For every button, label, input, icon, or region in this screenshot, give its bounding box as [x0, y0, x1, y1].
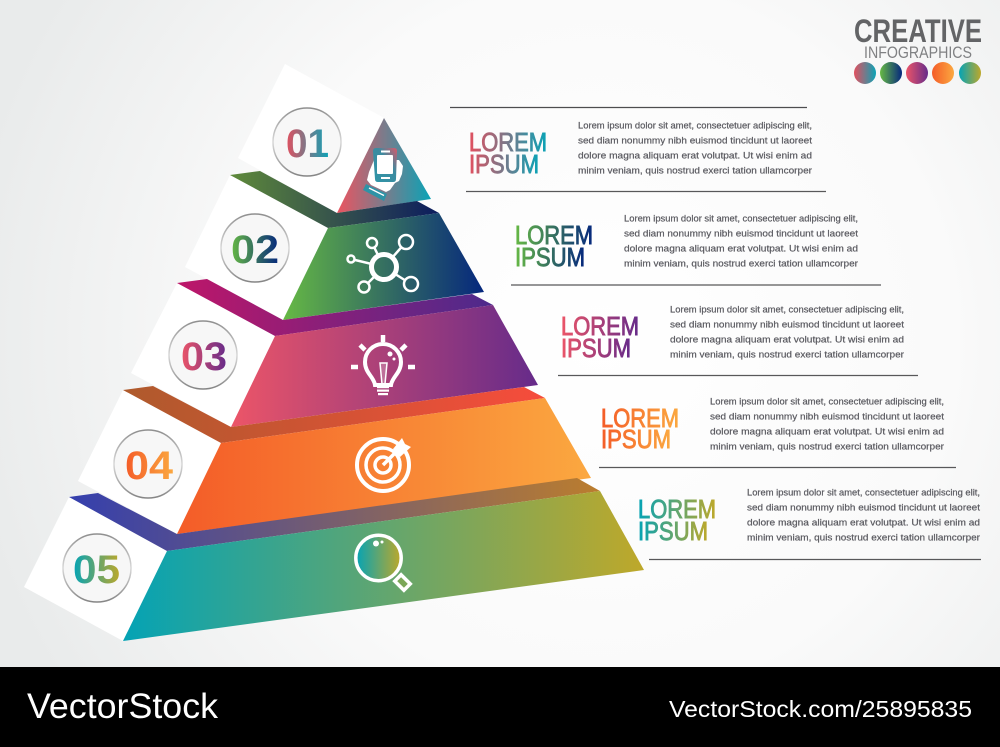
icon: phone in hand	[363, 148, 403, 201]
text block 3: IPSUM	[561, 333, 631, 363]
number badge 01	[273, 108, 341, 176]
pyramid tier 3	[123, 305, 545, 443]
number badge 05: 05	[73, 548, 120, 592]
icon: magnifying glass	[356, 535, 410, 590]
number badge 01: 01	[286, 122, 329, 166]
pyramid tier 2	[177, 213, 493, 336]
text block 2: IPSUM	[515, 242, 585, 272]
text block 2: LOREM	[515, 220, 593, 250]
text block 2: dolore magna aliquam erat volutpat. Ut wisi enim ad	[624, 244, 858, 254]
footer bar: VectorStock	[27, 687, 219, 726]
text block 1: dolore magna aliquam erat volutpat. Ut wisi enim ad	[578, 150, 812, 162]
number badge 02	[221, 214, 289, 282]
text block 3: minim veniam, quis nostrud exerci tation ullamcorper	[670, 350, 904, 360]
text block 5: dolore magna aliquam erat volutpat. Ut wisi enim ad	[747, 518, 980, 528]
text block 3: LOREM	[561, 311, 639, 341]
text block 3: dolore magna aliquam erat volutpat. Ut wisi enim ad	[670, 334, 904, 346]
text block 3: Lorem ipsum dolor sit amet, consectetuer adipiscing elit,	[670, 304, 904, 316]
text block 1	[450, 108, 826, 192]
icon: target with arrow	[357, 438, 411, 491]
text block 5: Lorem ipsum dolor sit amet, consectetuer adipiscing elit,	[747, 488, 980, 498]
pyramid tier 5	[123, 491, 644, 641]
text block 1: LOREM	[469, 127, 547, 157]
text block 4: LOREM	[601, 403, 679, 433]
text block 5: IPSUM	[638, 516, 708, 546]
text block 4: minim veniam, quis nostrud exerci tation ullamcorper	[710, 442, 944, 452]
text block 1: minim veniam, quis nostrud exerci tation ullamcorper	[578, 166, 812, 176]
logo: creative infographics	[854, 13, 982, 84]
text block 2: Lorem ipsum dolor sit amet, consectetuer adipiscing elit,	[624, 214, 858, 224]
number badge 04: 04	[125, 444, 174, 488]
icon: light bulb	[351, 335, 415, 400]
text block 1: IPSUM	[469, 149, 539, 179]
text block 3	[558, 304, 918, 376]
text block 4: IPSUM	[601, 424, 671, 454]
number badge 02: 02	[231, 228, 279, 272]
text block 4: Lorem ipsum dolor sit amet, consectetuer adipiscing elit,	[710, 396, 944, 408]
text block 2: sed diam nonummy nibh euismod tincidunt ut laoreet	[624, 228, 858, 240]
number badge 05	[63, 534, 131, 602]
number badge 03	[169, 321, 237, 389]
logo: creative infographics: INFOGRAPHICS	[864, 43, 972, 62]
text block 4: sed diam nonummy nibh euismod tincidunt ut laoreet	[710, 412, 944, 422]
text block 1: sed diam nonummy nibh euismod tincidunt ut laoreet	[578, 136, 812, 146]
number badge 03: 03	[181, 335, 227, 379]
text block 2: minim veniam, quis nostrud exerci tation ullamcorper	[624, 258, 858, 270]
footer bar: VectorStock.com/25895835	[669, 696, 972, 722]
text block 2	[511, 214, 881, 285]
text block 1: Lorem ipsum dolor sit amet, consectetuer adipiscing elit,	[578, 120, 812, 132]
icon: network hub	[348, 235, 418, 292]
text block 3: sed diam nonummy nibh euismod tincidunt ut laoreet	[670, 320, 904, 330]
text block 4: dolore magna aliquam erat volutpat. Ut wisi enim ad	[710, 426, 944, 438]
text block 5: minim veniam, quis nostrud exerci tation ullamcorper	[747, 532, 980, 544]
pyramid tier 1	[230, 118, 439, 228]
number badge 04	[114, 430, 182, 498]
footer bar	[0, 667, 1000, 747]
text block 5: LOREM	[638, 494, 716, 524]
text block 5	[638, 488, 981, 560]
text block 5: sed diam nonummy nibh euismod tincidunt ut laoreet	[747, 502, 980, 514]
text block 4	[599, 396, 956, 468]
panel: white side faces	[24, 64, 384, 641]
pyramid tier 4	[69, 398, 600, 551]
